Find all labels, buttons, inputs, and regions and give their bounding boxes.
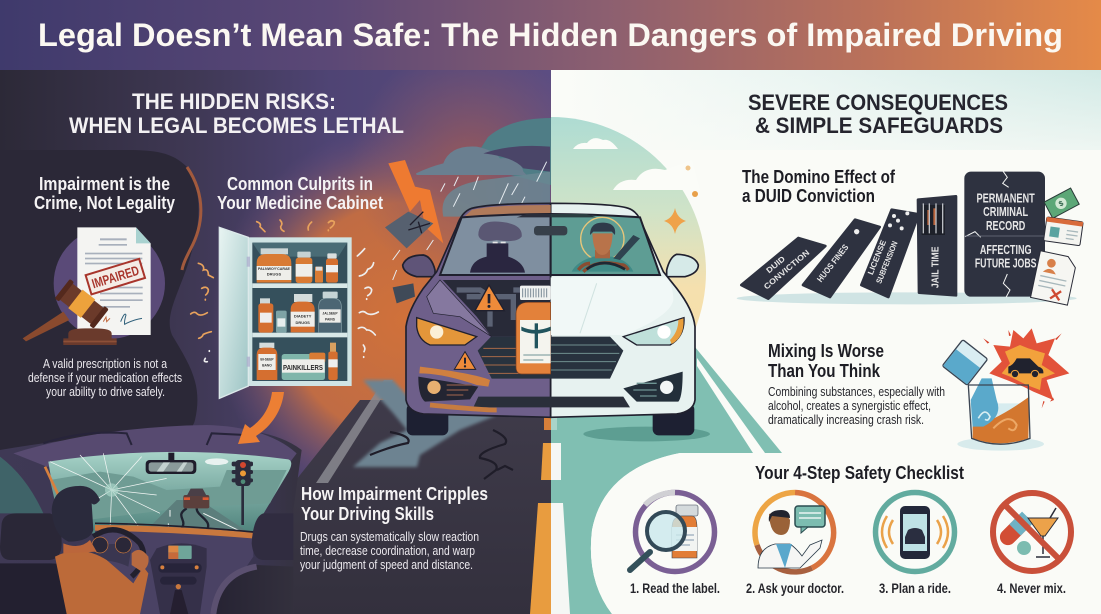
icon: ask your doctor <box>755 492 834 572</box>
checklist labels: 3. Plan a ride. <box>879 581 951 596</box>
icon: medicine cabinet: PAINKILLERS <box>283 363 323 372</box>
domino 2 <box>803 220 880 297</box>
domino 5: PERMANENT <box>976 192 1035 206</box>
text block: impairment: defense if your medication effects <box>28 371 182 385</box>
domino 5: AFFECTING <box>980 243 1032 257</box>
icon: money <box>1044 188 1079 218</box>
heading: hidden risks: THE HIDDEN RISKS: <box>132 89 336 114</box>
domino 1 <box>741 238 825 299</box>
text block: domino effect: a DUID Conviction <box>742 186 875 206</box>
domino 3: SUBFENSION <box>874 240 900 285</box>
icon: medicine cabinet: BANO <box>262 364 272 368</box>
bottles middle shelf <box>260 298 270 304</box>
title: Legal Doesn’t Mean Safe: The Hidden Dangers of Impaired Driving <box>38 17 1063 53</box>
text block: mixing <box>768 341 945 427</box>
heading: safety checklist: Your 4-Step Safety Checklist <box>755 463 964 483</box>
checklist labels <box>630 581 1066 596</box>
windshield crack <box>50 453 167 530</box>
domino 5: CRIMINAL <box>983 205 1028 219</box>
checklist labels: 2. Ask your doctor. <box>746 581 844 596</box>
text block: mixing: alcohol, creates a synergistic effect, <box>768 399 931 413</box>
ground shadow <box>583 427 710 441</box>
heading: severe consequences: SEVERE CONSEQUENCES <box>748 90 1008 115</box>
text block: mixing: Combining substances, especially with <box>768 385 945 399</box>
impaired driver silhouette <box>470 221 525 273</box>
mirrors <box>403 255 435 277</box>
text: common culprits heading: Your Medicine Cabinet <box>217 193 383 213</box>
traffic light <box>241 485 244 525</box>
checklist labels: 1. Read the label. <box>630 581 720 596</box>
skid marks <box>180 508 208 531</box>
icon: money: $ <box>1057 199 1065 208</box>
heading: hidden risks <box>69 89 404 138</box>
domino 5: FUTURE JOBS <box>975 256 1036 270</box>
icon: medicine cabinet: PALNWOY'CARAE <box>258 267 291 271</box>
text block: how impairment cripples: time, decrease coordination, and warp <box>300 544 475 558</box>
dashboard <box>95 525 253 614</box>
domino 1: CONVICTION <box>762 248 812 291</box>
sun circle <box>551 117 706 427</box>
clean hood <box>551 277 673 335</box>
domino 3: LICENSE <box>866 238 888 276</box>
panel: hidden risks background <box>0 70 551 614</box>
wheels <box>407 403 448 435</box>
car ahead <box>183 495 209 508</box>
rearview mirror <box>168 453 174 461</box>
text block: impairment: A valid prescription is not a <box>43 357 167 371</box>
sparkle star <box>664 208 686 234</box>
text block: domino effect <box>742 167 896 206</box>
text block: mixing: Than You Think <box>768 361 881 381</box>
icon: medicine cabinet: DIADETY <box>294 314 312 319</box>
windshield right <box>551 214 660 275</box>
lower bumper left <box>418 377 478 402</box>
heading: severe consequences <box>748 90 1008 138</box>
text block: mixing: dramatically increasing crash risk. <box>768 413 924 427</box>
illustration: split car <box>385 146 710 441</box>
text block: how impairment cripples: Drugs can systematically slow reaction <box>300 530 479 544</box>
icon: read the label <box>630 492 714 572</box>
icon: medicine cabinet: BI-SEEP <box>260 358 274 362</box>
bottles top shelf <box>261 248 288 254</box>
passenger seat <box>213 565 293 614</box>
text block: domino effect: The Domino Effect of <box>742 167 896 187</box>
engine bay <box>443 280 551 337</box>
body right <box>551 203 695 417</box>
domino 4 <box>918 196 956 295</box>
warning triangles <box>475 285 504 311</box>
heading: severe consequences: & SIMPLE SAFEGUARDS <box>755 113 1003 138</box>
domino 5 <box>964 171 1045 297</box>
text block: impairment: Crime, Not Legality <box>34 193 175 213</box>
console <box>150 543 207 614</box>
text block: how impairment cripples: Your Driving Skills <box>301 504 434 524</box>
text: common culprits heading: Common Culprits in <box>227 174 373 194</box>
text block: impairment <box>28 174 182 399</box>
arrow: orange down to driving scene <box>238 392 284 444</box>
door <box>219 227 248 398</box>
text block: mixing: Mixing Is Worse <box>768 341 884 361</box>
safety panel background <box>591 453 1101 614</box>
domino 5: RECORD <box>986 219 1025 233</box>
medicine bottle <box>516 286 551 374</box>
steering wheel <box>93 530 144 577</box>
gavel <box>23 312 69 341</box>
body left <box>406 203 551 417</box>
road: left side <box>280 380 570 614</box>
text: common culprits heading <box>217 174 383 213</box>
domino 2: HUOS FINES <box>815 242 851 284</box>
text block: how impairment cripples: your judgment of speed and distance. <box>300 558 473 572</box>
heading: hidden risks: WHEN LEGAL BECOMES LETHAL <box>69 113 404 138</box>
squiggles <box>191 220 378 362</box>
illustration: interior driving scene <box>0 425 302 614</box>
crumpled hood <box>427 280 492 337</box>
storm and lightning <box>385 146 550 303</box>
road centre dashes <box>530 415 570 614</box>
checklist labels: 4. Never mix. <box>997 581 1066 596</box>
windshield left <box>440 214 551 275</box>
header banner <box>0 0 1101 70</box>
domino 3 <box>861 210 919 297</box>
sober driver <box>572 217 640 272</box>
domino 4: JAIL TIME <box>930 246 941 288</box>
driver <box>55 551 148 614</box>
text block: how impairment cripples: How Impairment Cripples <box>301 484 488 504</box>
lower bumper right <box>623 372 683 402</box>
domino 1: DUID <box>765 254 787 275</box>
beaker <box>970 403 1029 443</box>
road: right side <box>551 347 1101 614</box>
icon: medicine cabinet: DRUGS <box>267 272 282 277</box>
icon: medicine cabinet <box>191 220 378 398</box>
icon: gavel and impaired document <box>23 227 165 345</box>
tilted glass <box>942 340 988 385</box>
icon: resume with X <box>1031 251 1077 305</box>
stamp: IMPAIRED <box>90 263 141 291</box>
driver seat and headrest <box>0 563 107 614</box>
bottles bottom shelf <box>259 343 274 348</box>
icon: medicine cabinet: PAINS <box>325 317 336 321</box>
panel: consequences background <box>470 70 1101 614</box>
grille <box>478 337 623 379</box>
headlights <box>417 318 477 345</box>
windshield <box>48 452 291 533</box>
icon: medicine cabinet: DRUGS <box>295 320 310 325</box>
explosion <box>989 328 1069 400</box>
icon: never mix <box>993 493 1071 571</box>
icon: plan a ride <box>876 492 954 572</box>
text block: impairment: Impairment is the <box>39 174 170 194</box>
illustration: dominoes <box>737 171 1083 305</box>
side window <box>0 457 43 513</box>
icon: medicine cabinet: JALSEEP <box>322 312 338 316</box>
sky clouds <box>573 138 700 190</box>
icon: mixing beaker and explosion <box>942 328 1069 451</box>
icon: torn card <box>1044 217 1083 246</box>
text block: impairment: your ability to drive safely. <box>46 385 165 399</box>
text block: how impairment cripples <box>300 484 488 572</box>
